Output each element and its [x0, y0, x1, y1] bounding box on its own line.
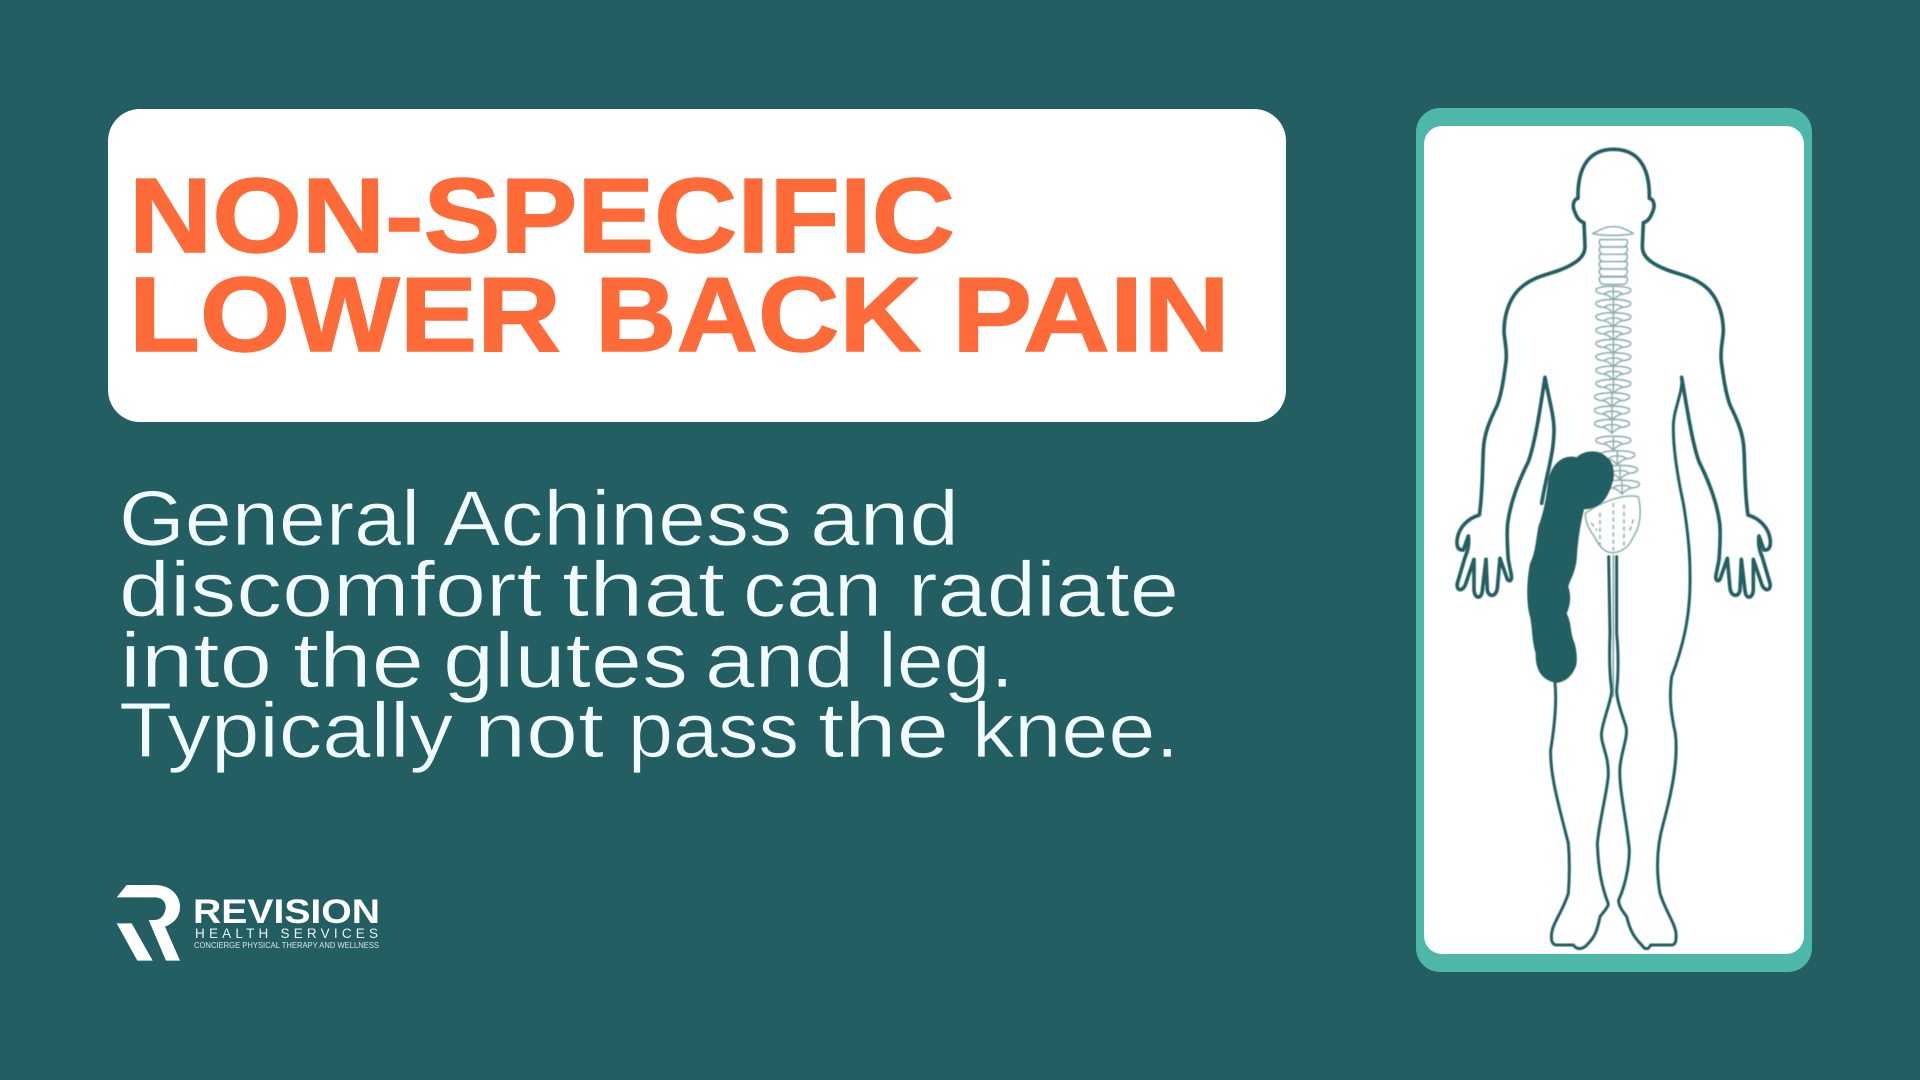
spine [1593, 227, 1639, 494]
heading: non-specific lower back pain: NON-SPECIFIC [129, 157, 955, 275]
logo subtitle: HEALTH SERVICES [195, 926, 378, 941]
heading: non-specific lower back pain [129, 157, 1230, 374]
logo tagline: CONCIERGE PHYSICAL THERAPY AND WELLNESS [194, 940, 379, 950]
text block: description: knee. [972, 686, 1179, 774]
icon: R monogram [117, 885, 180, 961]
text block: description [119, 474, 1179, 774]
text block: description: glutes [443, 616, 688, 704]
text block: description: General [119, 474, 420, 562]
body outline left half and legs [1457, 149, 1690, 949]
body outline right arm and head half [1613, 149, 1770, 597]
text block: description: discomfort [119, 545, 542, 633]
text block: description: can [743, 545, 882, 633]
text block: description: Typically [119, 686, 453, 774]
heading: non-specific lower back pain: LOWER [129, 256, 561, 374]
logo wordmark: REVISION [193, 893, 380, 931]
text block: description: pass [628, 686, 799, 774]
panel: body diagram [1416, 108, 1812, 972]
body figure [1457, 149, 1770, 949]
text block: description: the [818, 686, 949, 774]
text block: description: radiate [908, 545, 1179, 633]
text block: description: and [810, 474, 959, 562]
panel: title [108, 109, 1286, 422]
text block: description: the [293, 616, 424, 704]
text block: description: that [562, 545, 725, 633]
heading: non-specific lower back pain: PAIN [952, 256, 1230, 374]
heading: non-specific lower back pain: BACK [595, 256, 921, 374]
text block: description: into [120, 616, 272, 704]
cauda line [1611, 555, 1615, 697]
logo: revision health services [117, 885, 380, 961]
text block: description: and [705, 616, 854, 704]
pain region: glute and leg [1527, 451, 1614, 683]
text block: description: Achiness [443, 474, 792, 562]
text block: description: leg. [878, 616, 1014, 704]
text block: description: not [474, 686, 604, 774]
sacrum [1585, 496, 1640, 553]
